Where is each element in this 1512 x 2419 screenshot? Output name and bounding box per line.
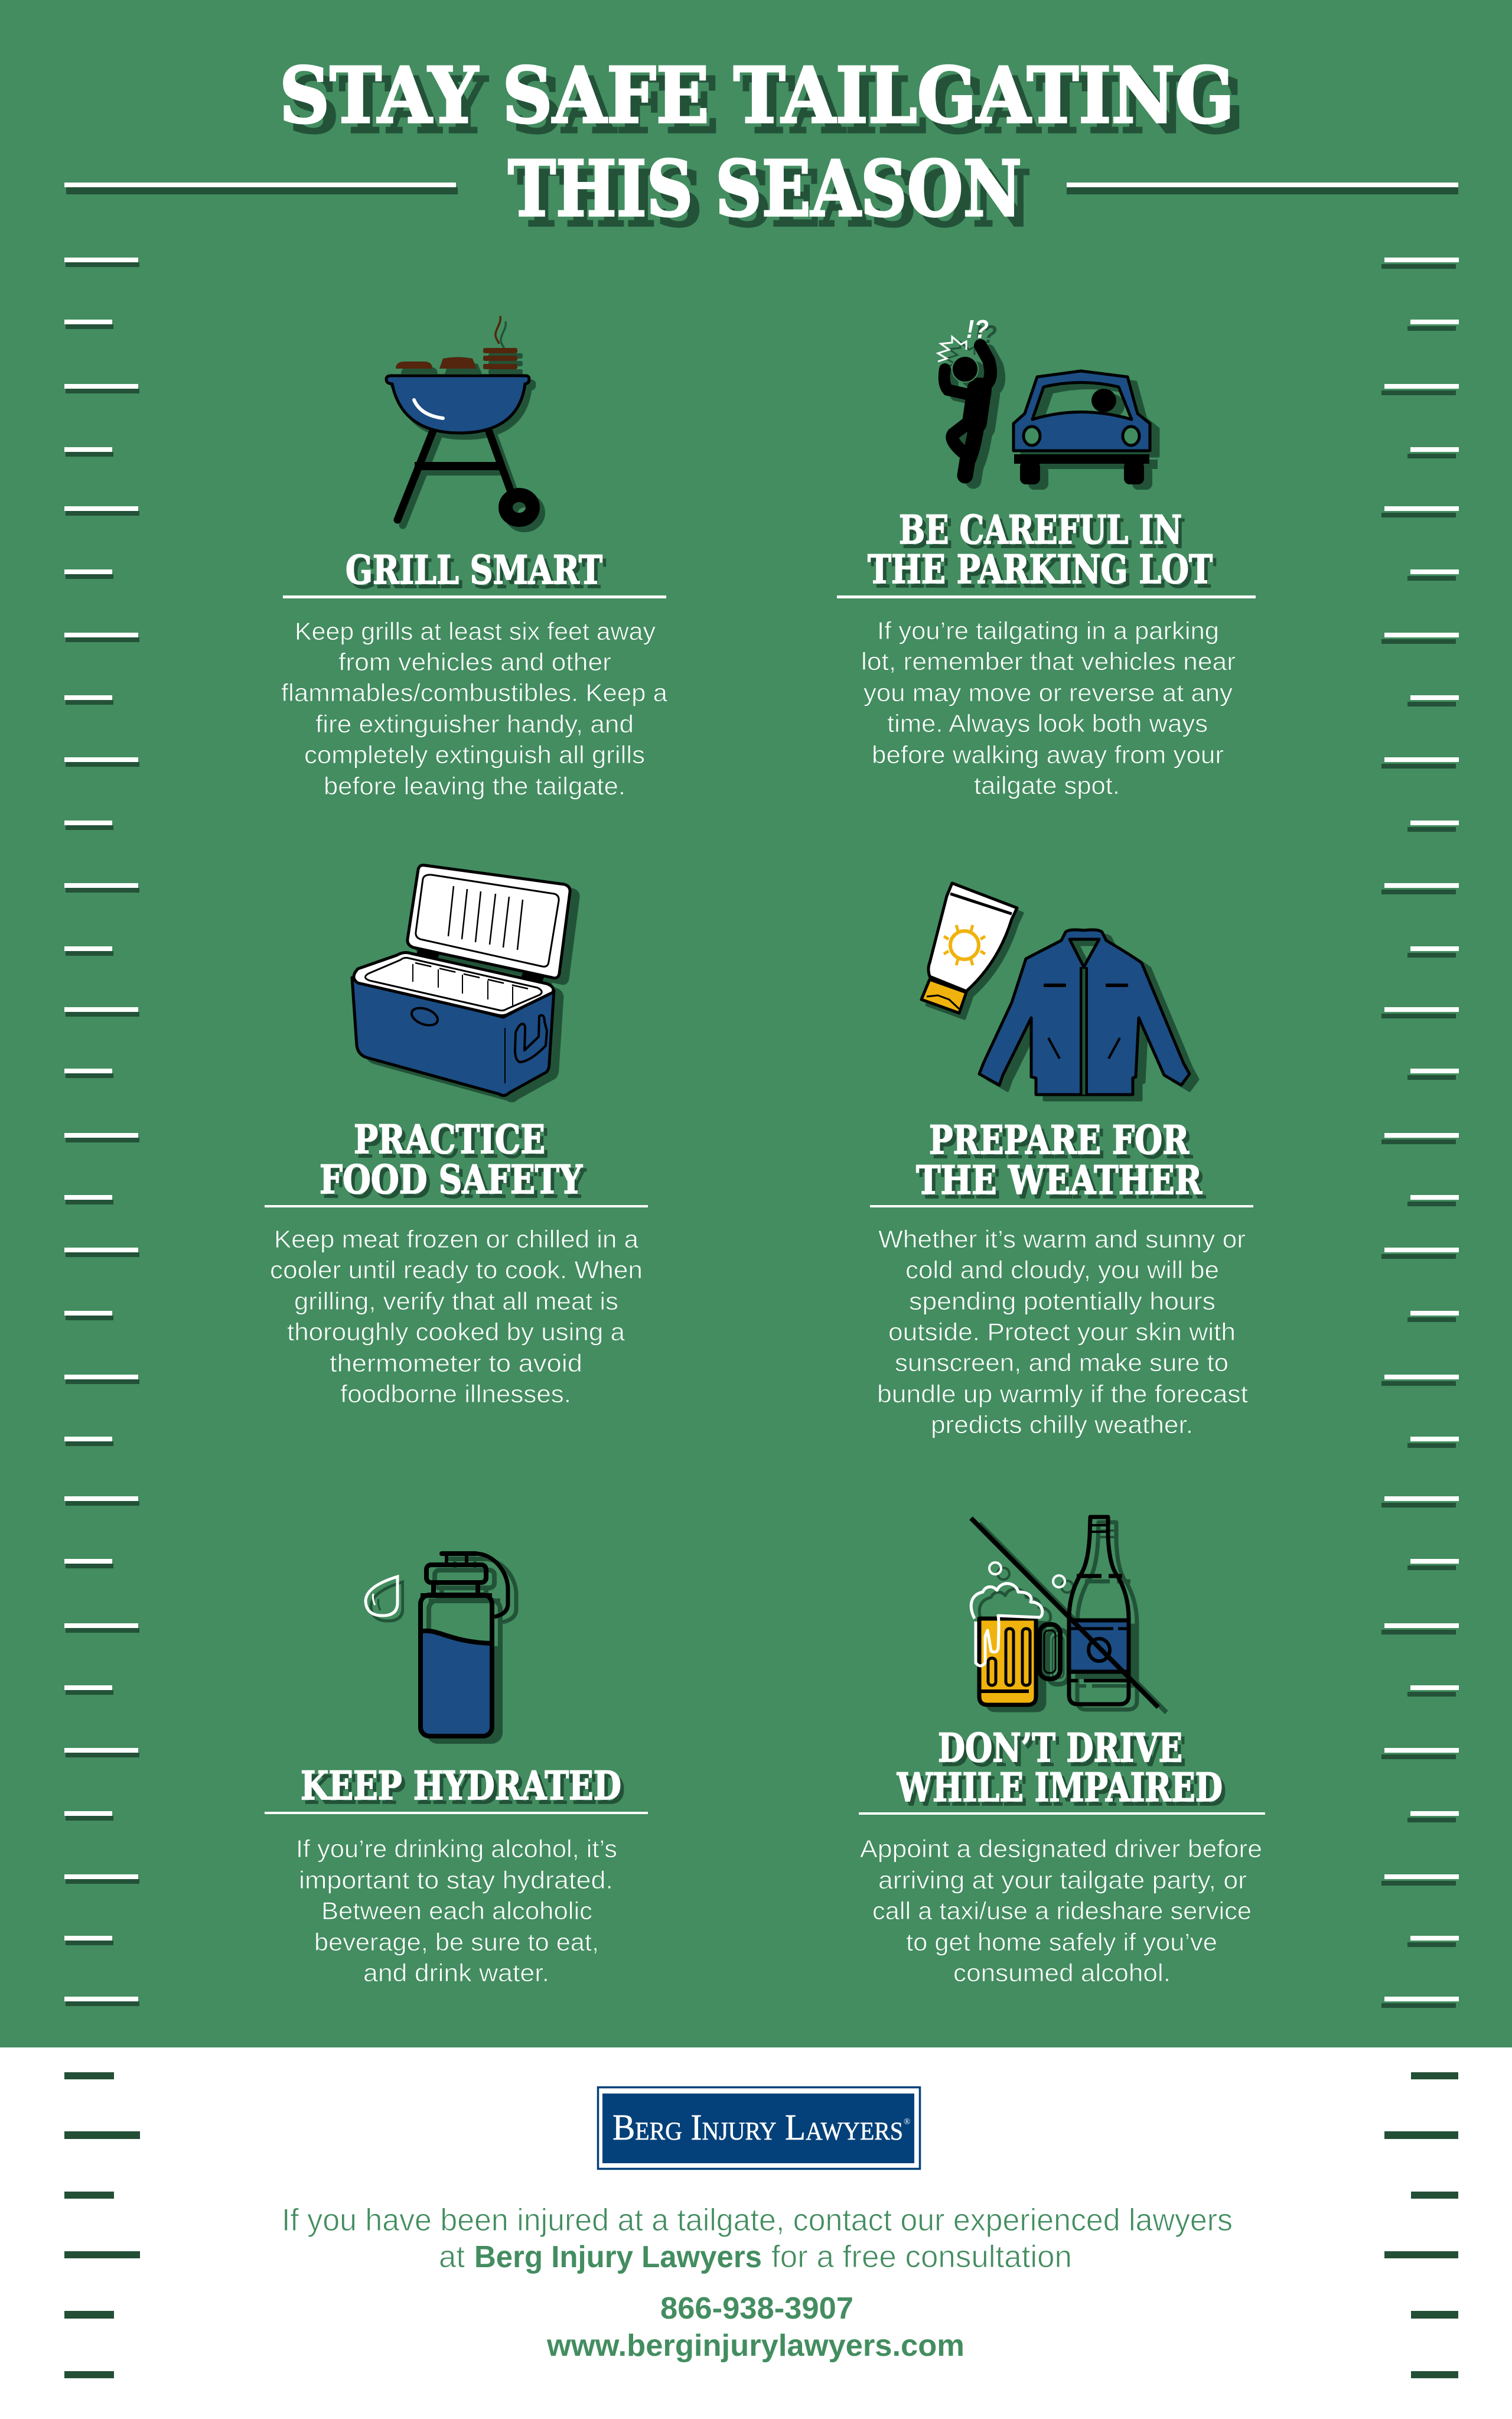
icon: jacket: [979, 930, 1190, 1095]
logo: ®: [904, 2117, 910, 2127]
text: parking lot body: If you’re tailgating in a parking: [877, 617, 1219, 644]
title: [279, 50, 1244, 244]
panel: impaired driving: [859, 1517, 1265, 1987]
logo: [598, 2088, 920, 2169]
text: weather body: cold and cloudy, you will be: [905, 1256, 1219, 1284]
icon: beer mug and wine bottle crossed out: [971, 1517, 1158, 1707]
heading: hydration: KEEP HYDRATED: [301, 1763, 621, 1809]
text: weather body: sunscreen, and make sure to: [895, 1349, 1228, 1376]
heading: food safety: PRACTICE: [354, 1116, 545, 1163]
text: grill smart body: fire extinguisher handy, and: [315, 710, 634, 738]
heading: parking lot: [868, 507, 1216, 597]
logo: Berg Injury Lawyers: [612, 2108, 903, 2148]
icon: person and car: !?: [966, 315, 989, 344]
icon: cooler: [352, 865, 570, 1096]
heading: food safety: FOOD SAFETY: [320, 1157, 583, 1203]
text: weather body: Whether it’s warm and sunny or: [878, 1225, 1246, 1253]
text: hydration body: important to stay hydrated.: [299, 1866, 613, 1894]
text: weather body: outside. Protect your skin with: [888, 1318, 1236, 1346]
icon: sunscreen: [921, 883, 1017, 1013]
text: grill smart body: from vehicles and other: [338, 648, 611, 676]
text: parking lot body: before walking away from your: [872, 741, 1224, 769]
heading: impaired driving: WHILE IMPAIRED: [900, 1769, 1226, 1815]
text: footer call to action: If you have been injured at a tailgate, contact our experienced lawyers: [282, 2203, 1233, 2238]
text: parking lot body: lot, remember that vehicles near: [861, 647, 1236, 675]
rule: [859, 1812, 1265, 1815]
text: hydration body: Between each alcoholic: [321, 1897, 592, 1925]
text: footer call to action: [282, 2203, 1233, 2274]
rule: [265, 1205, 648, 1207]
text: footer call to action: Berg Injury Lawyers: [474, 2240, 762, 2274]
text: weather body: spending potentially hours: [909, 1287, 1216, 1315]
heading: food safety: FOOD SAFETY: [323, 1161, 586, 1207]
panel: weather: [870, 883, 1253, 1438]
text: food safety body: thoroughly cooked by using a: [287, 1318, 625, 1346]
text: parking lot body: [861, 617, 1236, 799]
yard markers: footer: [64, 2072, 1458, 2378]
heading: grill smart: GRILL SMART: [346, 547, 602, 593]
text: grill smart body: Keep grills at least six feet away: [295, 617, 656, 645]
background: white footer: [0, 2047, 1512, 2419]
yard markers: right: [1381, 258, 1459, 2008]
text: website: www.berginjurylawyers.com: [546, 2329, 964, 2363]
heading: weather: THE WEATHER: [916, 1157, 1203, 1203]
heading: weather: THE WEATHER: [920, 1161, 1206, 1207]
icon: water bottle: [421, 1551, 508, 1736]
title rule: right: [1067, 183, 1458, 194]
text: hydration body: If you’re drinking alcohol, it’s: [296, 1835, 617, 1863]
heading: parking lot: BE CAREFUL IN: [902, 511, 1185, 557]
text: impaired driving body: Appoint a designated driver before: [860, 1835, 1262, 1863]
heading: food safety: PRACTICE: [357, 1121, 549, 1167]
text: food safety body: foodborne illnesses.: [340, 1380, 571, 1408]
text: food safety body: thermometer to avoid: [330, 1349, 582, 1377]
heading: weather: [916, 1117, 1206, 1207]
rule: [283, 595, 666, 598]
title: THIS SEASON: [517, 154, 1031, 244]
text: food safety body: cooler until ready to cook. When: [270, 1256, 643, 1284]
text: impaired driving body: consumed alcohol.: [953, 1959, 1171, 1987]
icon: water drop: [366, 1577, 397, 1616]
heading: weather: PREPARE FOR: [933, 1121, 1193, 1167]
text: hydration body: and drink water.: [363, 1959, 549, 1987]
icon: person and car: [938, 315, 1150, 484]
heading: hydration: KEEP HYDRATED: [304, 1767, 625, 1813]
heading: parking lot: THE PARKING LOT: [868, 546, 1213, 592]
text: food safety body: grilling, verify that all meat is: [294, 1287, 618, 1315]
panel: grill smart: [281, 316, 668, 800]
title: THIS SEASON: [508, 144, 1022, 234]
heading: parking lot: THE PARKING LOT: [871, 551, 1216, 597]
heading: impaired driving: [897, 1725, 1226, 1815]
text: food safety body: [270, 1225, 643, 1408]
text: footer call to action: at: [439, 2239, 465, 2274]
text: impaired driving body: call a taxi/use a rideshare service: [872, 1897, 1252, 1925]
text: hydration body: [296, 1835, 617, 1987]
text: weather body: [877, 1225, 1248, 1438]
rule: [870, 1205, 1253, 1207]
text: phone number: 866-938-3907: [660, 2291, 853, 2326]
text: weather body: bundle up warmly if the forecast: [877, 1380, 1248, 1408]
rule: [265, 1812, 648, 1814]
text: grill smart body: [281, 617, 668, 800]
text: hydration body: beverage, be sure to eat,: [314, 1928, 599, 1956]
text: grill smart body: before leaving the tailgate.: [324, 772, 625, 800]
panel: food safety: [265, 865, 648, 1408]
heading: grill smart: GRILL SMART: [349, 551, 606, 597]
heading: impaired driving: DON’T DRIVE: [938, 1725, 1182, 1771]
text: impaired driving body: arriving at your tailgate party, or: [878, 1866, 1247, 1894]
title: STAY SAFE TAILGATING: [289, 60, 1244, 151]
title rule: left: [64, 183, 458, 194]
heading: food safety: [320, 1116, 586, 1207]
heading: impaired driving: WHILE IMPAIRED: [897, 1764, 1223, 1811]
heading: impaired driving: DON’T DRIVE: [941, 1729, 1186, 1775]
text: impaired driving body: [860, 1835, 1262, 1987]
text: impaired driving body: to get home safely if you’ve: [906, 1928, 1217, 1956]
heading: parking lot: BE CAREFUL IN: [899, 507, 1182, 553]
rule: [837, 595, 1256, 598]
icon: grill: [386, 316, 533, 520]
text: parking lot body: time. Always look both ways: [887, 709, 1208, 737]
yard markers: left: [64, 258, 139, 2006]
heading: weather: PREPARE FOR: [929, 1117, 1190, 1163]
title: STAY SAFE TAILGATING: [279, 50, 1234, 141]
text: parking lot body: tailgate spot.: [974, 771, 1120, 799]
text: parking lot body: you may move or reverse at any: [863, 679, 1233, 707]
text: footer call to action: for a free consultation: [771, 2239, 1072, 2274]
panel: hydration: [265, 1551, 648, 1987]
text: weather body: predicts chilly weather.: [931, 1411, 1193, 1438]
text: grill smart body: flammables/combustibles. Keep a: [281, 679, 668, 707]
panel: parking lot: [837, 315, 1256, 799]
text: food safety body: Keep meat frozen or chilled in a: [274, 1225, 639, 1253]
text: grill smart body: completely extinguish all grills: [304, 741, 645, 769]
